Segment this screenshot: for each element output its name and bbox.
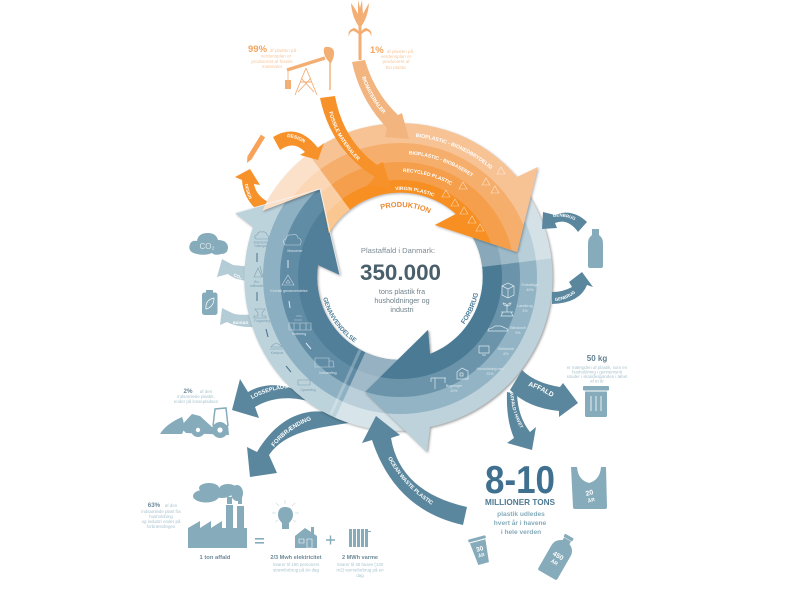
arrow: affald <box>510 370 578 417</box>
text: 63 percent: 63% <box>148 502 161 509</box>
sector: landbrug: Landbrug <box>517 304 533 308</box>
center text: industri <box>390 305 414 314</box>
sector: elektronik <box>479 346 514 356</box>
icon: plus <box>326 536 335 544</box>
label: genbrug top: GENBRUG <box>553 214 576 220</box>
heading: produktion: PRODUKTION <box>380 202 431 214</box>
stage: indsamling: Indsamling <box>319 371 337 375</box>
production band labels: BIOPLASTIC - BIOBASERET <box>409 150 474 176</box>
label: co2 arrow: CO₂ <box>233 272 243 281</box>
text: plastik udledes: hvert år i havene <box>494 519 547 527</box>
icon: equals <box>255 538 264 544</box>
label: 1 ton affald: 1 ton affald <box>200 555 231 561</box>
arrow: forbrænding <box>247 411 349 477</box>
label: affald: AFFALD <box>528 382 554 396</box>
stage: kemisk genanvendelse: Kemisk genanvendelse <box>270 289 308 293</box>
icon: cup: 30 <box>475 545 485 554</box>
text: plastik udledes: plastik udledes <box>497 511 545 518</box>
text: electricity: Svarer til 190 personers <box>273 562 320 567</box>
text: heat: 2 MWh varme <box>342 555 378 561</box>
text: heat: m2) varmeforbrug på en <box>336 568 384 572</box>
text: 1 percent bio <box>370 45 414 70</box>
sector: emballage: Emballage <box>522 283 538 287</box>
label: design top: DESIGN <box>287 134 306 143</box>
production band labels: RECYCLED PLASTIC <box>403 168 452 185</box>
icon: co2 cloud <box>189 233 228 255</box>
icons: plastic recycling marks <box>442 167 505 231</box>
icon: plastic bag: ÅR <box>587 496 596 505</box>
sector: bilindustri: 9% <box>515 331 521 335</box>
stage: kemisk genanvendelse <box>270 275 308 293</box>
stage: monomer: Monomer <box>287 249 303 253</box>
text: 2 percent: indsamlede plastik, <box>177 394 215 399</box>
text: 50 kg: er mængden af plastik, som en <box>567 365 628 370</box>
stage: opsamling <box>298 380 316 392</box>
sector: landbrug: 3% <box>522 309 528 313</box>
text: plastik udledes: i hele verden <box>501 529 541 536</box>
text: 50 kg: husholdning i gennemsnit <box>572 370 623 374</box>
sector: emballage <box>502 283 538 298</box>
center text: husholdninger og <box>374 296 430 305</box>
icon: wheel loader <box>160 408 229 438</box>
icon: bottle <box>588 229 603 268</box>
center text: 350.000 <box>360 260 441 285</box>
icon: sugarcane <box>349 0 371 60</box>
icon: radiator <box>349 529 371 547</box>
icon: gas bottle <box>202 290 218 315</box>
stage: sortering: Sortering <box>292 332 306 336</box>
cycle arrow: forbrug (consumption) <box>365 196 556 454</box>
text: 63 percent: og industri ender på <box>142 519 181 524</box>
stage: opsamling: Opsamling <box>300 388 316 392</box>
text: 63 percent <box>141 502 181 529</box>
teal arrowhead edge <box>235 189 340 275</box>
text: electricity: strømforbrug på én dag <box>273 568 319 572</box>
cycle arrow: produktion <box>262 122 540 254</box>
sector: bygninger <box>431 378 463 393</box>
arrow: losseplads <box>232 379 312 418</box>
text: 63 percent: indsamlede plast fra <box>141 509 181 514</box>
stage: bioraffinaderi: raffinaderi <box>250 284 264 288</box>
arrow: genbrug bottom <box>552 272 593 304</box>
arrow: design left <box>235 169 270 215</box>
text: 1 percent bio: af plasten på <box>387 48 414 54</box>
label: genbrug bottom: GENBRUG <box>555 291 575 301</box>
heading: genanvendelse: GENANVENDELSE <box>324 298 357 342</box>
text: 63 percent: husholdning <box>149 514 173 519</box>
text: 99 percent fossil: verdensplan er <box>261 54 292 58</box>
stage: brændstof: Naturgas <box>255 244 268 248</box>
center text <box>360 246 441 314</box>
consumption sector icons and labels <box>431 283 538 393</box>
icon: oil pump <box>285 47 334 95</box>
production band labels: VIRGIN PLASTIC <box>395 186 434 196</box>
text: 99 percent fossil: 99% <box>248 44 268 55</box>
heading: forbrug: FORBRUG <box>460 292 478 324</box>
stage: kompost <box>270 344 283 355</box>
text: 2 percent: af den <box>200 389 213 394</box>
small flow arrows in recycling ring <box>257 253 311 372</box>
arrow: biogas <box>220 308 258 327</box>
label: fossile materialer: FOSSILE MATERIALER <box>329 111 360 161</box>
text: 63 percent: forbrændingen <box>147 524 176 529</box>
label: affald i havet: AFFALD I HAVET <box>510 393 524 428</box>
label: ocean waste plastic: OCEAN WASTE PLASTIC <box>388 457 433 504</box>
text: 2 percent: 2% <box>184 388 193 395</box>
sector: emballage: 40% <box>526 288 534 292</box>
stage: monomer <box>283 234 303 253</box>
stage: kompost: Kompost <box>271 351 283 355</box>
subheading: millioner tons: MILLIONER TONS <box>485 497 555 507</box>
sector: bilindustri: Bilindustri <box>510 326 526 330</box>
stage: brændstof: Brændstof <box>254 240 268 244</box>
text: heat: dag <box>356 573 364 578</box>
production band labels: BIOPLASTIC - BIONEDBRYDELIG <box>416 133 492 169</box>
text: 1 percent bio: produceret af <box>382 59 410 64</box>
sector: landbrug <box>501 303 533 316</box>
icon: bottle 450 years: ÅR <box>549 558 559 568</box>
text: 99 percent fossil: af plasten på <box>270 47 297 53</box>
text: 50 kg: smider i skraldespanden i løbet <box>567 374 628 379</box>
recycling stages icons <box>270 234 337 375</box>
stage: brændstof <box>254 232 269 248</box>
sector: bilindustri <box>488 326 526 335</box>
text: 99 percent fossil: produceret af fossile <box>251 59 293 64</box>
center text: Plastaffald i Danmark: <box>361 246 435 255</box>
sector: bygninger: 20% <box>450 389 458 393</box>
icon: cup <box>468 535 492 566</box>
sector: husholdning: 22% <box>486 372 494 376</box>
icon: co2 cloud: CO₂ <box>199 242 215 251</box>
text: 2 percent: ender på lossepladsen <box>174 399 219 404</box>
production band labels <box>395 133 492 196</box>
sector: husholdning: Husholdning mm <box>477 367 503 371</box>
icon: plastic bag <box>571 467 607 509</box>
label: design left: DESIGN <box>245 184 252 199</box>
stage: forgasning: Forgasning <box>254 319 270 323</box>
text: 50 kg: 50 kg <box>587 354 607 363</box>
icon: bottle 450 years <box>537 531 579 581</box>
text: heat <box>336 555 384 578</box>
icon: house <box>295 527 317 548</box>
icon: light bulb <box>272 500 299 529</box>
icon: plastic bag: 20 <box>585 489 594 498</box>
arrow: design top <box>273 132 324 160</box>
icon: trash bin <box>583 386 609 417</box>
icon: pencil <box>247 136 263 163</box>
text: 99 percent fossil: materialer <box>262 64 283 69</box>
label: losseplads: LOSSEPLADS <box>250 384 288 399</box>
arrow: ocean waste plastic <box>362 416 467 525</box>
cycle arrow: genanvendelse (recycling) <box>235 189 407 434</box>
text: 1 percent bio: 1% <box>370 45 384 56</box>
stage: bioraffinaderi: Bio- <box>254 280 260 284</box>
icon: factory <box>188 483 247 548</box>
text: electricity: 2/3 Mwh elektricitet <box>270 555 322 561</box>
label: biomaterialer: BIOMATERIALER <box>362 76 386 114</box>
text: heat: Svarer til 40 huses (130 <box>337 562 384 567</box>
text: 63 percent: af den <box>165 503 178 508</box>
arrow: genbrug top <box>542 212 587 232</box>
label: biogas arrow: BIOGAS <box>233 321 248 325</box>
stage: bioraffinaderi <box>250 266 264 288</box>
text: 2 percent <box>174 388 219 404</box>
arrow: co2 <box>217 259 252 281</box>
text: 1 percent bio: verdensplan er <box>381 54 412 59</box>
icon: cup: ÅR <box>477 551 486 559</box>
text: 99 percent fossil <box>248 44 297 69</box>
text: electricity <box>270 555 322 572</box>
sector: elektronik: 6% <box>503 352 509 356</box>
sector: husholdning <box>457 367 503 379</box>
text: 50 kg <box>567 354 628 384</box>
stage: forgasning <box>254 309 270 323</box>
arrow: fossile materialer <box>320 96 391 188</box>
center text: tons plastik fra <box>379 287 425 296</box>
big number: 8-10: 8-10 <box>485 459 555 502</box>
stage: indsamling <box>315 358 337 375</box>
text: 1 percent bio: bio plastic <box>386 65 407 70</box>
sector: elektronik: Elektronik <box>498 347 514 351</box>
sector: bygninger: Bygninger <box>446 384 463 388</box>
outer ring icons <box>250 232 316 392</box>
label: forbrænding: FORBRÆNDING <box>271 416 311 447</box>
arrow: biomaterialer <box>352 60 409 139</box>
stage: sortering <box>289 316 311 336</box>
text: plastik udledes <box>494 511 547 536</box>
arrow: affald i havet <box>507 392 536 450</box>
icon: bottle 450 years: 450 <box>551 551 565 562</box>
text: 50 kg: af et år <box>590 378 604 384</box>
